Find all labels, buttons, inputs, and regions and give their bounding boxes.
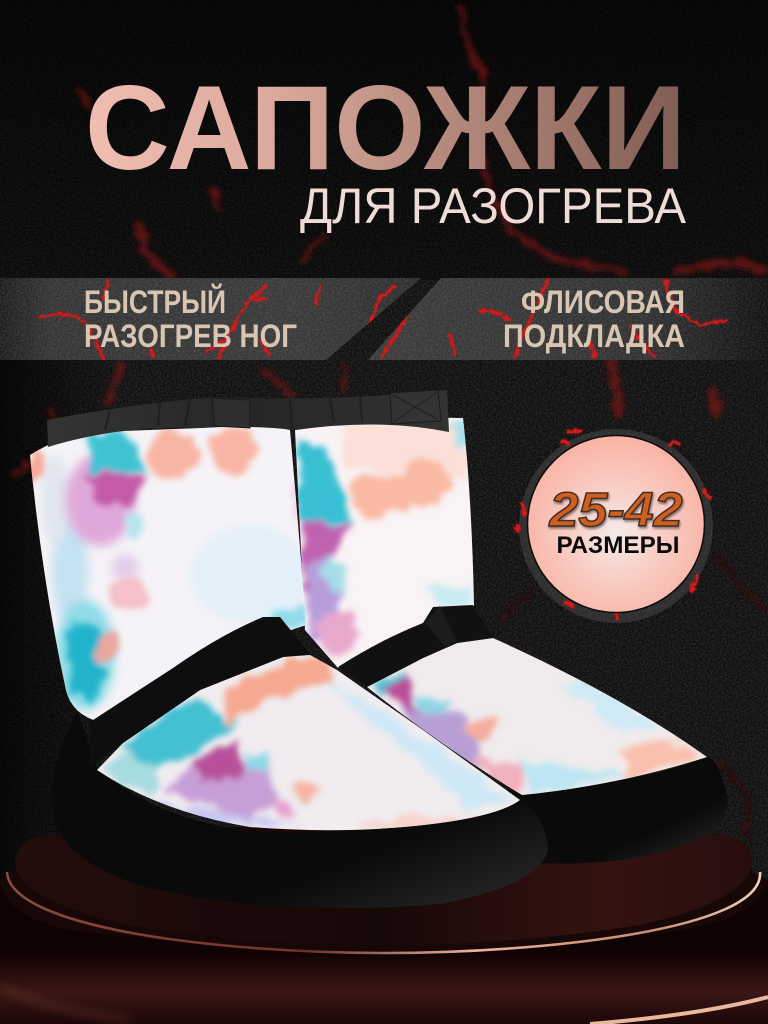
pedestal rim highlight — [7, 872, 760, 953]
band: right feature strip — [360, 278, 768, 360]
back boot shaft — [295, 418, 474, 668]
back boot sole — [500, 757, 728, 864]
subtitle: ДЛЯ РАЗОГРЕВА — [300, 178, 687, 234]
feature text: fast warm-up — [84, 284, 297, 354]
back boot — [360, 630, 728, 864]
title: САПОЖКИ — [85, 61, 686, 195]
front boot shaft — [25, 420, 310, 725]
back boot foot — [367, 638, 707, 795]
size label: РАЗМЕРЫ — [556, 532, 680, 559]
feature text: fleece lining: ФЛИСОВАЯ — [521, 284, 685, 320]
feature text: fast warm-up: БЫСТРЫЙ — [84, 284, 226, 320]
pedestal — [0, 825, 768, 1024]
collar tab left — [212, 398, 250, 428]
feature text: fast warm-up: РАЗОГРЕВ НОГ — [84, 318, 297, 354]
front boot sole — [52, 712, 548, 908]
pedestal lower highlight left — [0, 987, 130, 1020]
back boot strap — [338, 605, 493, 687]
pedestal lower highlight right — [590, 997, 768, 1024]
size numbers: 25-42 — [548, 484, 683, 537]
collar tab right — [390, 390, 441, 424]
feature text: fleece lining — [503, 284, 685, 354]
front boot strap — [90, 617, 310, 767]
feature text: fleece lining: ПОДКЛАДКА — [503, 318, 685, 354]
front boot foot — [97, 655, 520, 830]
band: left feature strip — [0, 278, 430, 360]
front boot — [25, 420, 548, 908]
size badge — [512, 427, 714, 623]
elastic collar — [47, 390, 449, 447]
